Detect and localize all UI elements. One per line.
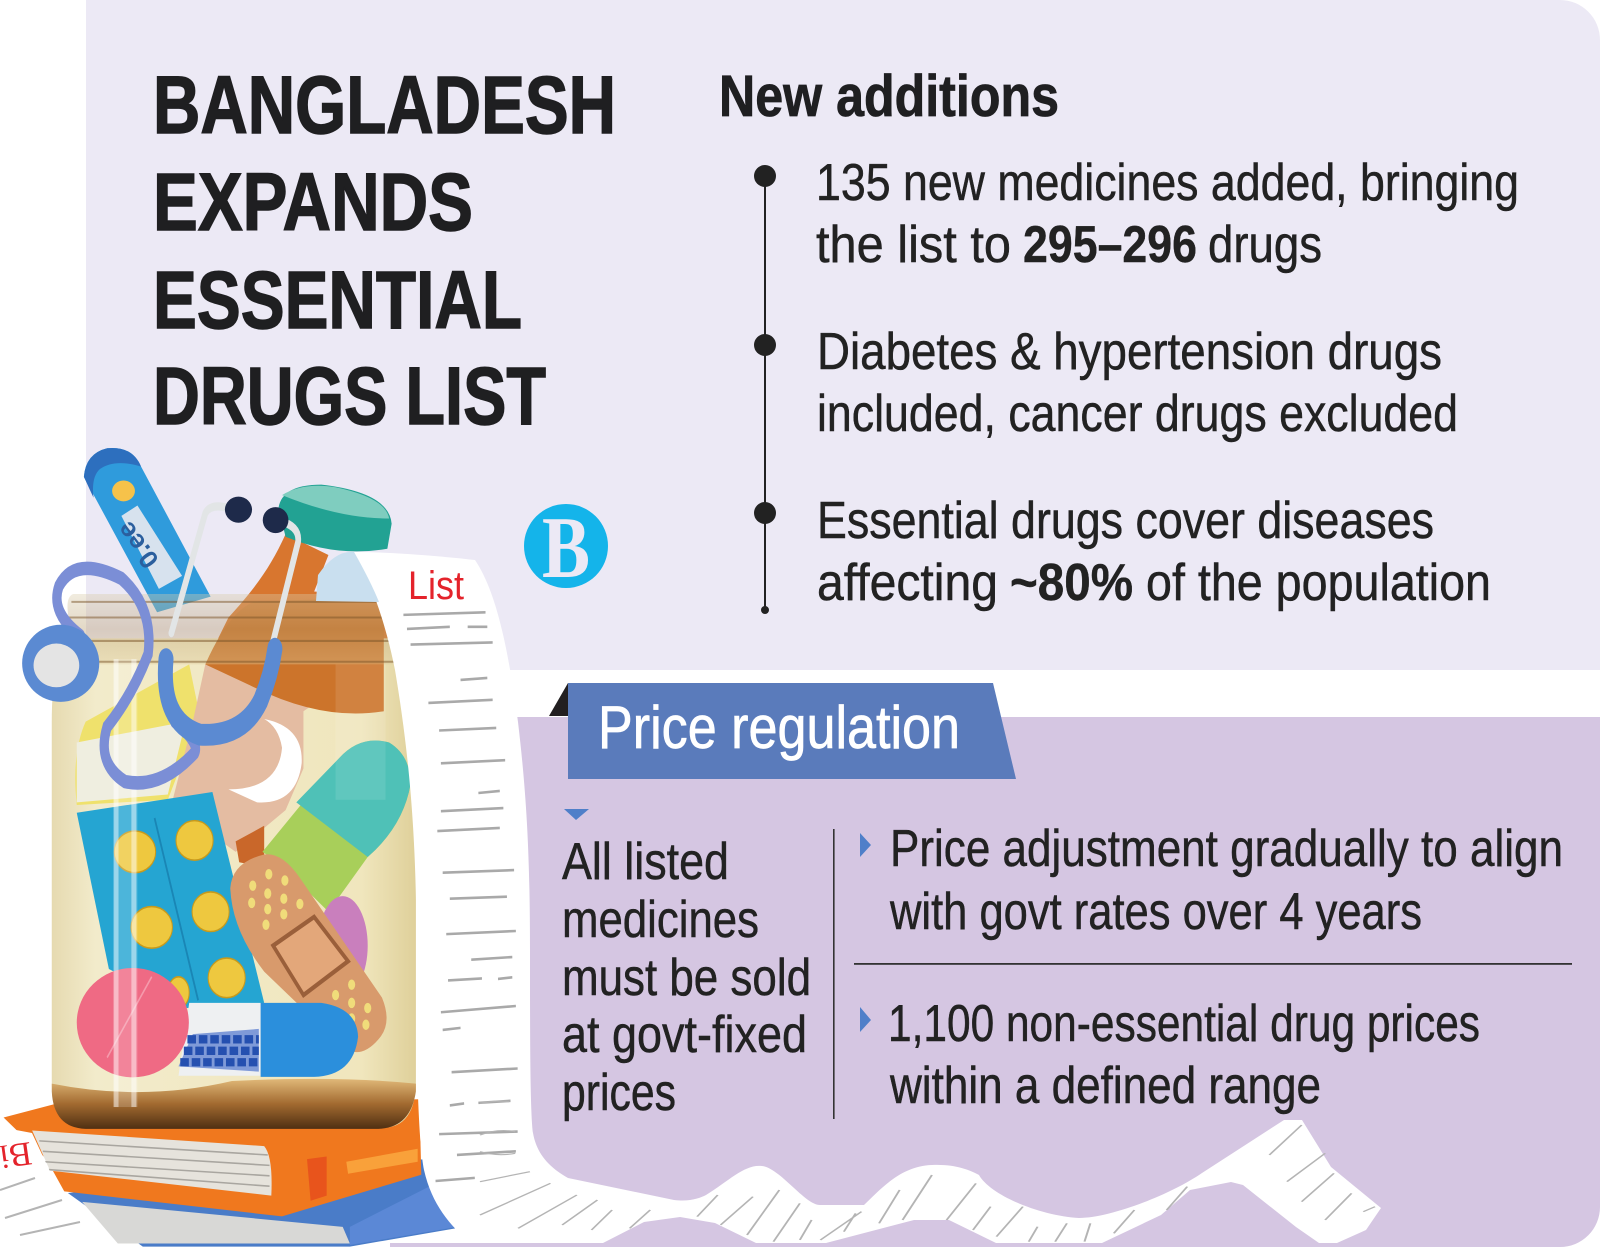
icon: thermometer: 0.ee	[110, 516, 165, 574]
text block: population coverage: ~80%	[1010, 554, 1133, 612]
banner: price regulation: Price regulation	[598, 694, 960, 761]
icon: label behind	[75, 664, 200, 805]
icon: blue capsule	[179, 1003, 358, 1077]
title	[153, 60, 616, 442]
paper fold shadow	[316, 552, 379, 602]
text block: new medicines: drugs	[1208, 216, 1322, 274]
text block: diabetes and hypertension: included, cancer drugs excluded	[817, 385, 1458, 443]
text block: population coverage: Essential drugs cover diseases	[817, 492, 1434, 550]
icon: stethoscope ear tips	[225, 497, 288, 533]
icon: blue book	[68, 1159, 464, 1247]
text block: non-essential prices: 1,100 non-essential drug prices	[888, 995, 1480, 1053]
text block: population coverage	[817, 492, 1491, 612]
jar rim	[61, 594, 395, 664]
text block: diabetes and hypertension: Diabetes & hypertension drugs	[817, 323, 1442, 381]
illustration: paper list ribbon	[316, 552, 1381, 1243]
icon: thermometer	[84, 448, 211, 612]
banner: price regulation	[549, 683, 1016, 779]
text block: diabetes and hypertension	[817, 323, 1458, 443]
panel: new additions background	[86, 0, 1600, 670]
text block: fixed prices: at govt-fixed	[562, 1006, 807, 1064]
jar highlights	[114, 659, 386, 1107]
icon: arrow one	[860, 833, 871, 857]
text block: non-essential prices: within a defined range	[889, 1057, 1321, 1115]
icon: pink tablet	[318, 896, 368, 995]
text block: fixed prices: All listed	[562, 833, 729, 891]
icon: publisher logo	[524, 500, 608, 597]
icon: publisher logo: B	[542, 500, 590, 597]
icon: stethoscope chest piece	[22, 625, 99, 702]
text block: new medicines: the list to	[816, 216, 1011, 274]
title: DRUGS LIST	[153, 351, 546, 442]
text block: price adjustment	[889, 820, 1563, 941]
icon: bottle through jar	[171, 597, 384, 867]
text: handwritten list label: List	[408, 564, 464, 608]
icon: arrow two	[860, 1007, 871, 1032]
illustration: small paper corner	[0, 1127, 104, 1247]
text block: fixed prices: medicines	[562, 891, 759, 949]
icon: bandage	[230, 854, 387, 1052]
icon: list lines	[403, 612, 518, 1181]
title: EXPANDS	[153, 157, 473, 248]
text block: population coverage: affecting	[817, 554, 998, 612]
panel: price regulation background	[390, 717, 1600, 1247]
text block: fixed prices: prices	[562, 1064, 676, 1122]
icon: orange book	[4, 1099, 421, 1216]
title: BANGLADESH	[153, 60, 616, 151]
text block: new medicines	[816, 154, 1519, 274]
text block: price adjustment: with govt rates over 4 years	[889, 883, 1422, 941]
icon: ribbon tail lines	[480, 1101, 1375, 1242]
text block: population coverage: of the population	[1146, 554, 1491, 612]
icon: capsule green and teal	[262, 741, 411, 912]
title: ESSENTIAL	[153, 255, 522, 346]
panel: jar glass	[52, 638, 416, 1128]
text block: new medicines: 295–296	[1023, 216, 1197, 274]
icon: blister pack	[77, 792, 264, 1008]
timeline	[754, 165, 776, 614]
heading: new additions: New additions	[719, 64, 1059, 129]
text block: fixed prices: must be sold	[562, 949, 811, 1007]
icon: bottle	[179, 485, 392, 847]
jar base	[52, 1079, 416, 1129]
illustration: medicine jar on books	[4, 448, 464, 1247]
text block: fixed prices	[562, 833, 811, 1122]
icon: down marker	[564, 809, 589, 820]
text block: non-essential prices	[888, 995, 1480, 1115]
icon: stethoscope	[57, 506, 298, 783]
icon: pink pill	[77, 968, 189, 1077]
